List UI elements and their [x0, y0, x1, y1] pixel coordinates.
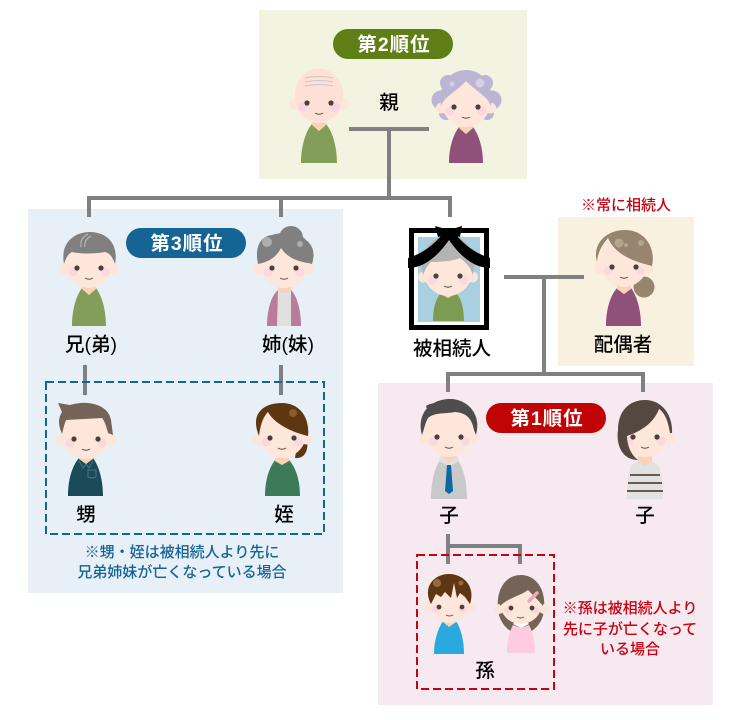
label: elder sister: 姉(妹): [262, 334, 314, 356]
label: spouse: 配偶者: [594, 334, 652, 356]
person: elder sister: [254, 226, 314, 326]
connector lines: siblings to nephew and niece: [85, 365, 281, 395]
connector lines: parents to siblings and deceased: [87, 129, 450, 217]
badge: first rank: 第1順位: [510, 408, 584, 430]
note: always an heir: ※常に相続人: [581, 196, 671, 214]
note: nephew and niece condition: ※甥・姪は被相続人より先に: [85, 543, 279, 561]
connector lines: deceased and spouse to children: [448, 277, 643, 392]
person: niece: [252, 403, 312, 496]
label: deceased: 被相続人: [413, 338, 491, 360]
icon: memorial portrait of deceased: [408, 226, 490, 328]
note: nephew and niece condition: 兄弟姉妹が亡くなっている場合: [77, 563, 287, 581]
badge: third rank: [126, 228, 246, 258]
note: grandchild condition: 先に子が亡くなって: [563, 620, 697, 638]
note: grandchild condition: ※孫は被相続人より: [563, 599, 697, 617]
panel: third rank (siblings): [28, 209, 343, 593]
label: nephew: 甥: [76, 504, 96, 526]
label: daughter: 子: [635, 505, 655, 527]
label: niece: 姪: [274, 504, 294, 526]
panel: spouse: [558, 217, 694, 366]
note: nephew and niece condition: [77, 543, 287, 581]
person: nephew: [56, 403, 116, 496]
person: grandson: [423, 574, 476, 654]
panel: first rank (children): [378, 383, 713, 705]
note: grandchild condition: いる場合: [600, 641, 660, 658]
person: elder brother: [59, 232, 119, 326]
badge: third rank: 第3順位: [150, 233, 224, 255]
connector lines: child to grandchildren: [448, 534, 520, 564]
label: son: 子: [439, 505, 459, 527]
label: parents: 親: [379, 92, 399, 114]
note: grandchild condition: [563, 599, 697, 658]
person: grandfather: [289, 68, 349, 163]
person: granddaughter: [494, 575, 549, 653]
dashed box: nephew and niece: [46, 382, 324, 534]
badge: first rank: [486, 403, 606, 433]
label: grandchildren: 孫: [475, 660, 495, 682]
panel: second rank (parents): [259, 10, 527, 179]
badge: second rank: [333, 29, 453, 59]
person: grandmother: [432, 70, 502, 163]
badge: second rank: 第2順位: [357, 34, 431, 56]
label: elder brother: 兄(弟): [65, 334, 117, 356]
person: son: [419, 399, 479, 499]
person: spouse: [594, 230, 654, 326]
person: daughter: [615, 400, 675, 499]
dashed box: grandchildren: [417, 555, 554, 689]
